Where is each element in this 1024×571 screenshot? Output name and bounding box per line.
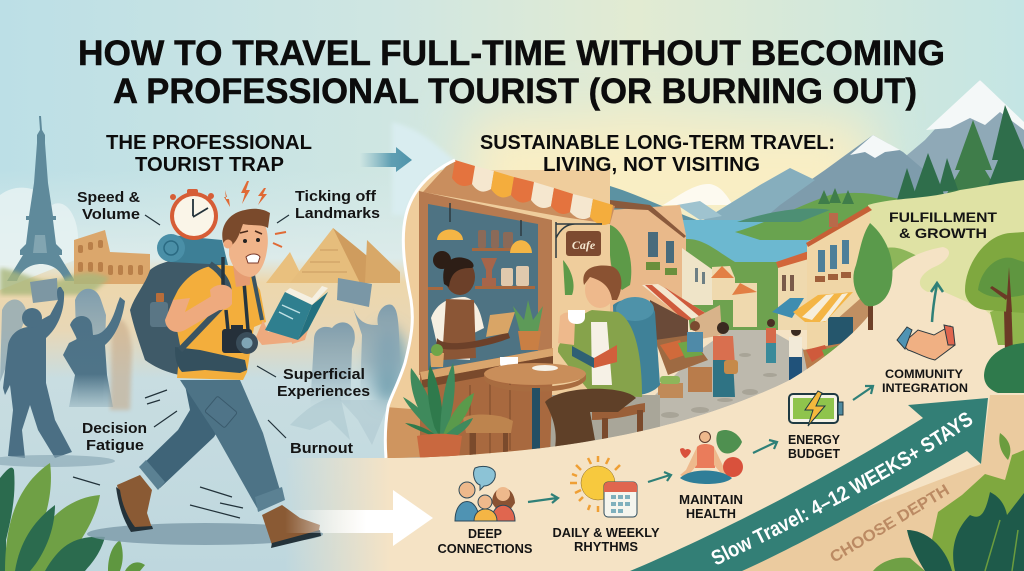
mid green — [680, 239, 780, 330]
green vine — [563, 260, 574, 295]
label: speed and volume — [77, 189, 140, 223]
step: maintain health — [679, 430, 743, 521]
green hills — [735, 193, 905, 240]
label: ticking off landmarks — [295, 188, 380, 222]
step: maintain health: MAINTAIN — [679, 492, 743, 507]
icon: pyramids — [266, 228, 400, 283]
label: decision fatigue: Fatigue — [86, 437, 144, 454]
back right house — [778, 260, 807, 330]
shelves — [428, 248, 535, 290]
icon: camera — [222, 325, 258, 354]
market shoppers — [687, 321, 738, 397]
arrow 1 — [528, 494, 558, 503]
hanging sign: Cafe — [556, 222, 602, 258]
traveler — [545, 266, 660, 448]
hip belt — [175, 347, 247, 373]
cafe wall — [380, 170, 610, 470]
step: community integration — [882, 325, 968, 395]
roof — [423, 160, 615, 224]
title: A PROFESSIONAL TOURIST (OR BURNING OUT) — [113, 72, 917, 111]
cafe scene — [380, 160, 660, 470]
step: daily and weekly rhythms: DAILY & WEEKLY — [552, 525, 660, 540]
small pale mountain — [677, 201, 722, 220]
bottom-left foliage — [0, 463, 145, 571]
arrow 5 — [931, 283, 943, 322]
awning — [452, 160, 613, 225]
arrow 3 — [753, 440, 777, 453]
barista — [431, 251, 515, 360]
scene edge line — [385, 160, 455, 458]
label: ticking off landmarks: Landmarks — [295, 205, 380, 222]
step: deep connections — [438, 466, 533, 556]
conifers — [818, 105, 1024, 204]
lamp — [437, 203, 463, 240]
step: energy budget — [788, 391, 843, 461]
step: community integration: INTEGRATION — [882, 381, 968, 395]
icon: guidebook — [265, 286, 328, 340]
motion and leader lines — [73, 215, 289, 518]
small potted plant — [430, 344, 444, 367]
counter — [420, 348, 553, 460]
heading: sustainable long-term travel: SUSTAINABLE LONG-TERM TRAVEL: — [480, 132, 835, 154]
left backdrop: landmarks — [0, 116, 400, 295]
stool — [592, 403, 645, 439]
label: decision fatigue: Decision — [82, 420, 147, 437]
striped awning — [642, 284, 709, 321]
sand area under arrow — [700, 395, 1024, 571]
protest sign left — [30, 278, 58, 303]
step: daily and weekly rhythms — [552, 456, 660, 554]
icon: stopwatch — [170, 189, 218, 240]
back boot — [117, 475, 152, 530]
right backdrop: mountains and lake — [610, 80, 1024, 345]
lamp — [510, 220, 532, 253]
front boot — [262, 505, 320, 545]
near stool — [463, 415, 513, 459]
path ribbon: cream road — [425, 247, 1024, 571]
white arrow — [285, 490, 433, 546]
arrow 2 — [648, 472, 671, 482]
step: maintain health: HEALTH — [686, 506, 736, 521]
silhouette woman — [63, 297, 125, 407]
floor — [540, 395, 660, 450]
green scrub — [0, 268, 110, 295]
silhouette man — [3, 287, 72, 458]
heading: sustainable long-term travel: LIVING, NOT VISITING — [543, 154, 760, 176]
arm — [165, 288, 228, 332]
boot sole — [116, 487, 321, 548]
front right house — [807, 208, 872, 355]
orange roof houses — [712, 266, 735, 300]
traveler under stress — [87, 181, 328, 548]
icon: Eiffel Tower — [7, 116, 75, 281]
shirt — [173, 265, 266, 380]
street — [608, 330, 820, 438]
label: superficial experiences — [277, 366, 370, 400]
bedroll — [157, 234, 228, 265]
icon: people — [455, 466, 515, 521]
label: speed and volume: Speed & — [77, 189, 140, 206]
icon: meditating figure with greens — [680, 430, 743, 484]
ground shadow — [87, 523, 323, 545]
yellow awning — [793, 292, 853, 322]
round table — [484, 363, 586, 450]
label: superficial experiences: Superficial — [283, 366, 365, 383]
label: ticking off landmarks: Ticking off — [295, 188, 377, 205]
heading: the professional tourist trap: THE PROFESSIONAL — [106, 132, 312, 154]
village — [608, 200, 872, 438]
small blue awning — [772, 298, 804, 318]
heading: sustainable long-term travel — [480, 132, 835, 176]
label: fulfillment and growth: FULFILLMENT — [889, 209, 998, 225]
protest sign right — [337, 278, 372, 307]
right tree — [965, 232, 1024, 353]
icon: battery — [789, 391, 843, 426]
big snow mountain — [850, 80, 1024, 210]
label: burnout: Burnout — [290, 440, 353, 457]
icon: Colosseum — [74, 230, 150, 284]
label: speed and volume: Volume — [82, 206, 140, 223]
lower wall — [385, 407, 425, 460]
backpack — [130, 259, 232, 377]
green vine — [610, 225, 631, 290]
bush — [984, 343, 1024, 393]
step: deep connections: DEEP — [468, 526, 502, 541]
bottom-right foliage — [873, 433, 1024, 571]
label: decision fatigue — [82, 420, 147, 454]
title — [78, 34, 945, 111]
title: HOW TO TRAVEL FULL-TIME WITHOUT BECOMING — [78, 34, 945, 73]
heading: the professional tourist trap: TOURIST TRAP — [135, 154, 284, 176]
arrow 4 — [853, 386, 873, 400]
head — [222, 209, 270, 287]
dark leaf mass — [907, 530, 952, 571]
terracotta pot — [417, 434, 462, 458]
pale green hill — [868, 180, 1024, 345]
step: daily and weekly rhythms: RHYTHMS — [574, 539, 638, 554]
cloud — [0, 188, 78, 290]
step: energy budget: BUDGET — [788, 446, 840, 461]
trap labels — [77, 188, 380, 457]
green verge — [990, 300, 1024, 345]
heading: the professional tourist trap — [106, 132, 312, 176]
far mountain — [700, 168, 815, 222]
label: fulfillment and growth — [889, 209, 998, 241]
pale curve backing — [392, 122, 455, 215]
hanging sign: Cafe: Cafe — [572, 238, 596, 252]
light leaf mass — [925, 450, 1024, 571]
coffee cup — [499, 357, 518, 366]
window frame — [419, 191, 552, 375]
crowd silhouettes — [0, 278, 400, 467]
white building — [682, 248, 713, 305]
teal arrow — [630, 398, 988, 571]
step: community integration: COMMUNITY — [885, 367, 963, 381]
step: deep connections: CONNECTIONS — [438, 541, 533, 556]
label: choose depth: CHOOSE DEPTH — [827, 482, 953, 566]
ground shadow — [0, 455, 115, 467]
cloud — [663, 184, 733, 205]
label: superficial experiences: Experiences — [277, 383, 370, 400]
teal hill — [610, 186, 716, 235]
counter plant — [513, 300, 543, 350]
arrow label: Slow Travel: 4–12 WEEKS+ STAYS — [712, 412, 972, 564]
back leg — [140, 385, 224, 488]
lake — [680, 220, 850, 280]
step: energy budget: ENERGY — [788, 432, 840, 447]
left tree — [853, 223, 892, 330]
camera strap — [223, 257, 248, 330]
arrow between sections — [360, 147, 412, 172]
label: fulfillment and growth: & GROWTH — [899, 225, 987, 241]
produce stall — [655, 335, 712, 398]
other arm — [256, 320, 295, 345]
middle mountain — [760, 135, 930, 215]
right trees — [853, 223, 1024, 393]
front leg — [180, 380, 282, 508]
large foreground plant — [403, 363, 474, 440]
icon: handshake — [897, 325, 955, 360]
icon: sun and calendar — [570, 456, 637, 517]
stress marks — [224, 181, 286, 247]
pack strap — [180, 264, 229, 350]
tall peach building — [610, 205, 686, 315]
